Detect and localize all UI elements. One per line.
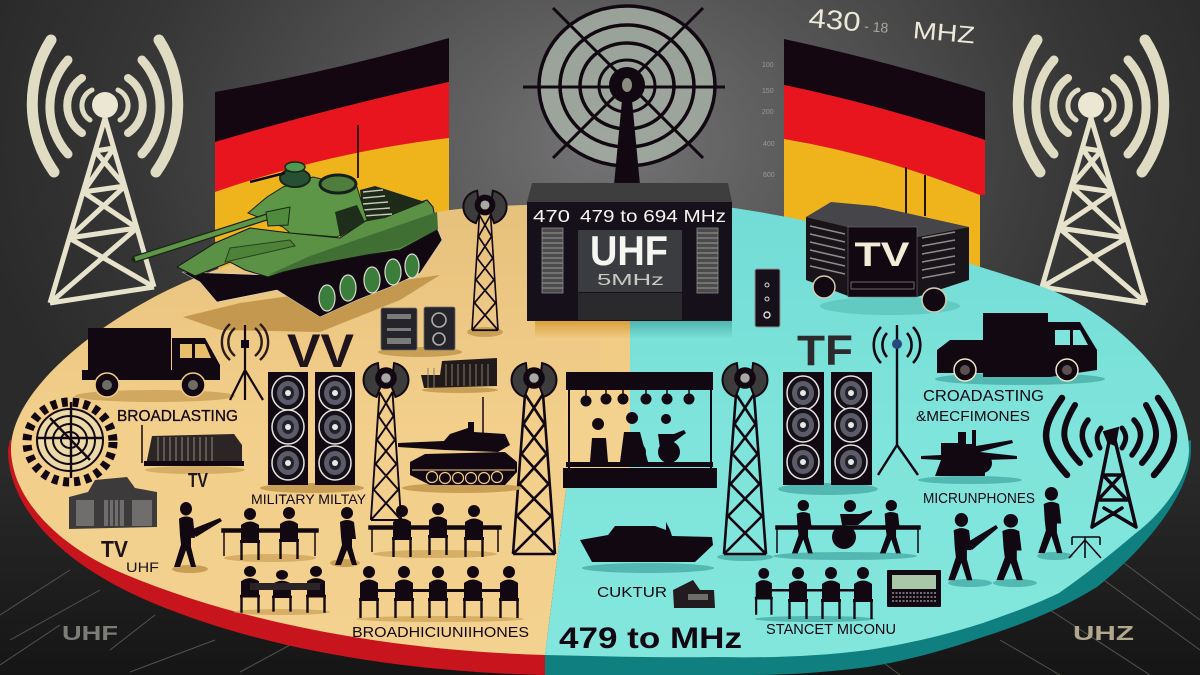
- bottom tank silhouette: [580, 522, 714, 573]
- small equipment bottom: [673, 580, 715, 608]
- TV label lower left: TV: [101, 536, 129, 562]
- guitarist figure: [172, 502, 222, 573]
- MECFIMONES label: &MECFIMONES: [916, 409, 1030, 425]
- STANCET MICONU label: STANCET MICONU: [766, 621, 896, 638]
- large UHZ text lower right: UHZ: [1073, 623, 1134, 645]
- floor with cracks: [0, 470, 1200, 675]
- right antenna tower with waves: [1018, 40, 1164, 303]
- TF label: TF: [797, 327, 853, 375]
- stage band silhouettes: [590, 412, 686, 462]
- building: [69, 477, 157, 529]
- 5MHz label: 5MHz: [597, 272, 664, 289]
- drum table figures: [773, 500, 920, 560]
- laptop: [887, 570, 941, 607]
- large UHF text lower left: UHF: [62, 623, 118, 645]
- rim of disc: teal right side: [545, 440, 1191, 675]
- left microphone stand: [222, 324, 268, 400]
- flag: right German flag: [784, 39, 985, 280]
- small amplifiers: [378, 307, 462, 357]
- VV label: VV: [287, 324, 355, 377]
- faint scale ticks beside right flag: [762, 62, 775, 179]
- TV van screen label: TV: [854, 236, 910, 274]
- band silhouette right: [918, 430, 1022, 484]
- small equipment rack: [421, 358, 498, 393]
- top frequency label 430 -18 MHZ: 430: [807, 3, 862, 37]
- MICRUNPHONES label: MICRUNPHONES: [923, 491, 1035, 507]
- standing figure: [330, 507, 360, 567]
- stage with band: [563, 372, 717, 488]
- small lattice tower: [463, 191, 507, 337]
- unit frequency label: 470: [533, 206, 570, 226]
- left antenna tower with waves: [32, 40, 178, 303]
- left speakers: [260, 372, 364, 493]
- right truck: [935, 313, 1105, 385]
- centre small speaker: [755, 269, 780, 327]
- tank shadow: [183, 275, 440, 332]
- UHF main unit: [527, 183, 732, 372]
- BROADLASTING label: BROADLASTING: [117, 408, 238, 425]
- TV broadcast box: [142, 425, 245, 474]
- disc surface: teal half: [545, 205, 1189, 657]
- small black tank: [398, 397, 522, 493]
- black signal tower right: [1046, 398, 1174, 527]
- left stage towers: [364, 363, 556, 554]
- CROADASTING label: CROADASTING: [923, 388, 1044, 405]
- right speakers: [778, 372, 878, 495]
- top frequency label 430 -18 MHZ: [807, 3, 976, 49]
- big 479 to MHz label: 479 to MHz: [559, 622, 742, 655]
- seal emblem: [27, 402, 113, 482]
- lower right table figures: [755, 567, 875, 622]
- faint scale ticks beside right flag: 600: [763, 172, 775, 179]
- table with three figures: [369, 503, 501, 558]
- left table figures: [222, 507, 318, 562]
- CUKTUR label: CUKTUR: [597, 584, 667, 601]
- flag: left German flag: [215, 38, 449, 300]
- faint scale ticks beside right flag: 200: [762, 109, 774, 116]
- faint scale ticks beside right flag: 400: [763, 141, 775, 148]
- right microphone stand: [874, 325, 920, 475]
- UHF small label: UHF: [126, 559, 159, 575]
- right stage tower: [717, 363, 773, 561]
- lower centre table group: [356, 566, 524, 622]
- small TV label: TV: [188, 470, 209, 492]
- rim of disc: red left side: [8, 440, 560, 675]
- faint scale ticks beside right flag: 150: [762, 88, 774, 95]
- left truck: [75, 328, 235, 402]
- faint scale ticks beside right flag: 100: [762, 62, 774, 69]
- UHF label: UHF: [590, 227, 668, 274]
- top frequency label 430 -18 MHZ: MHZ: [912, 17, 976, 49]
- TV van: [806, 167, 969, 315]
- unit frequency range: 479 to 694 MHz: [580, 206, 726, 226]
- lower left table group: [234, 566, 330, 615]
- central dish antenna: [523, 6, 725, 195]
- disc surface: sand half: [11, 204, 640, 655]
- green battle tank: [135, 125, 442, 317]
- MILITARY MILTAY label: MILITARY MILTAY: [251, 492, 366, 507]
- music stand: [1069, 537, 1101, 558]
- top frequency label 430 -18 MHZ: - 18: [864, 18, 889, 36]
- BROADHICIUNIIHONES label: BROADHICIUNIIHONES: [352, 625, 529, 641]
- guitarist and walkers right: [948, 487, 1073, 587]
